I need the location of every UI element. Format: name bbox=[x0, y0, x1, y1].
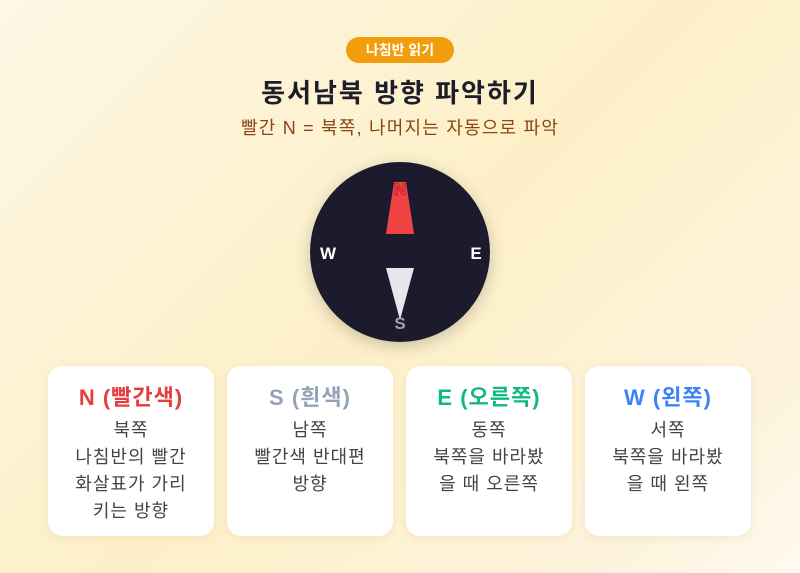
compass: S bbox=[394, 314, 406, 333]
needle north bbox=[386, 182, 414, 234]
card: W bbox=[585, 366, 751, 536]
card: W: 을 때 왼쪽 bbox=[627, 474, 709, 494]
compass: W bbox=[320, 244, 337, 263]
card: W: 서쪽 bbox=[650, 420, 686, 440]
compass: N bbox=[394, 180, 406, 199]
card: N: 북쪽 bbox=[113, 420, 149, 440]
card: E: E (오른쪽) bbox=[437, 385, 541, 410]
subtitle: 빨간 N = 북쪽, 나머지는 자동으로 파악 bbox=[241, 118, 559, 138]
card: E: 을 때 오른쪽 bbox=[439, 474, 539, 494]
card: S: S (흰색) bbox=[269, 385, 351, 410]
card: N: N (빨간색) bbox=[79, 385, 183, 410]
card: E: 동쪽 bbox=[471, 420, 507, 440]
title: 동서남북 방향 파악하기 bbox=[261, 78, 539, 108]
card: E bbox=[406, 366, 572, 536]
card: S: 남쪽 bbox=[292, 420, 328, 440]
badge: 나침반 읽기 bbox=[366, 42, 434, 58]
badge bbox=[346, 37, 454, 63]
card: S: 빨간색 반대편 bbox=[254, 447, 366, 467]
card: W: 북쪽을 바라봤 bbox=[612, 447, 724, 467]
card: S: 방향 bbox=[292, 474, 328, 494]
card: N bbox=[48, 366, 214, 536]
card: N: 나침반의 빨간 bbox=[75, 447, 187, 467]
compass: E bbox=[470, 244, 482, 263]
card: N: 키는 방향 bbox=[93, 501, 169, 521]
needle south bbox=[386, 268, 414, 320]
card: N: 화살표가 가리 bbox=[75, 474, 187, 494]
compass bbox=[303, 159, 497, 353]
card: E: 북쪽을 바라봤 bbox=[433, 447, 545, 467]
card: W: W (왼쪽) bbox=[624, 385, 712, 410]
card: S bbox=[227, 366, 393, 536]
